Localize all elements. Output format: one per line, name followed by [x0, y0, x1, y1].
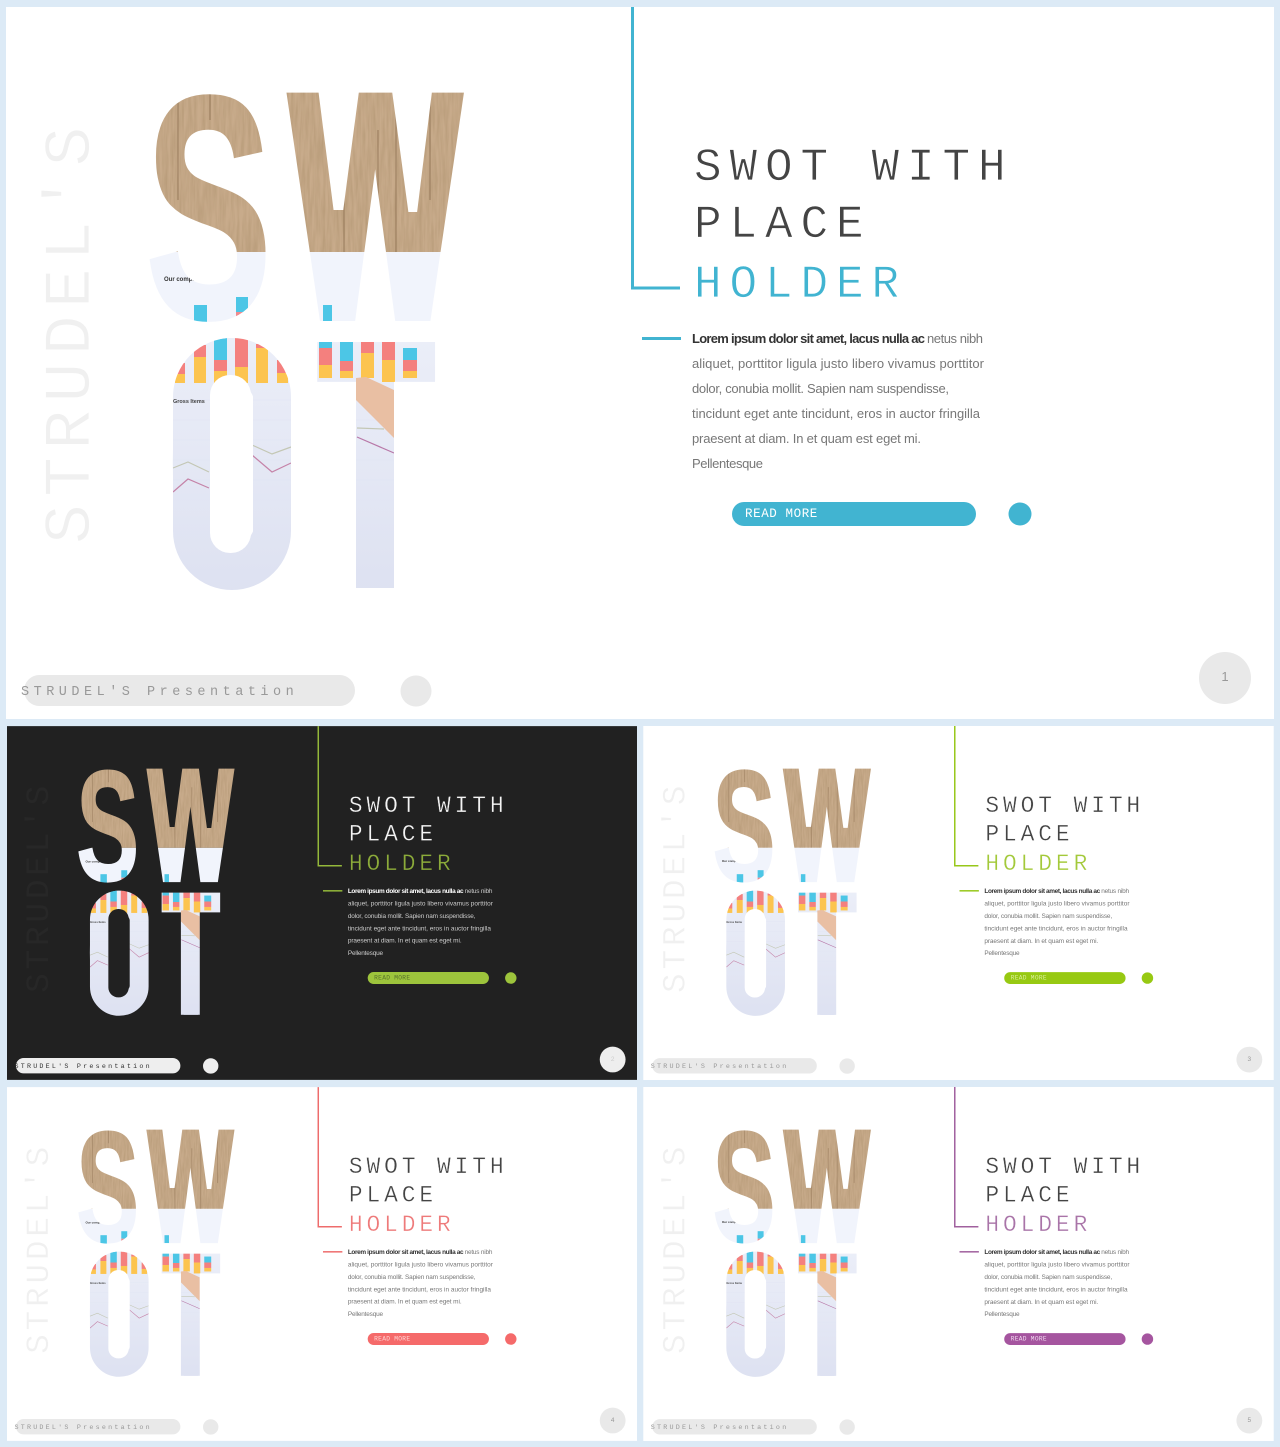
footer dot	[839, 1419, 855, 1435]
title: SWOT WITH	[349, 793, 508, 819]
SWOT picture letters	[710, 1126, 876, 1381]
accent bracket line	[318, 1087, 342, 1227]
read more button	[368, 1333, 489, 1345]
body text: dolor, conubia mollit. Sapien nam suspendisse,	[348, 913, 476, 920]
body text: netus nibh	[465, 888, 493, 895]
vertical watermark: STRUDEL'S	[34, 119, 109, 544]
title: PLACE	[985, 1182, 1074, 1208]
body text: Pellentesque	[984, 950, 1020, 957]
title: PLACE	[985, 821, 1074, 847]
page number	[1236, 1047, 1262, 1073]
title: HOLDER	[694, 259, 907, 311]
body text: netus nibh	[465, 1249, 493, 1256]
body text: praesent at diam. In et quam est eget mi.	[348, 1299, 462, 1306]
read more button: READ MORE	[374, 1336, 410, 1343]
body text: tincidunt eget ante tincidunt, eros in auctor fringilla	[984, 925, 1128, 932]
page number: 3	[1248, 1056, 1252, 1063]
body text: Lorem ipsum dolor sit amet, lacus nulla ac	[984, 888, 1101, 895]
body text: Pellentesque	[984, 1311, 1020, 1318]
body text: dolor, conubia mollit. Sapien nam suspendisse,	[348, 1274, 476, 1281]
body text: praesent at diam. In et quam est eget mi.	[348, 938, 462, 945]
footer label pill: STRUDEL'S Presentation	[651, 1063, 788, 1071]
title: HOLDER	[985, 851, 1091, 877]
body text: praesent at diam. In et quam est eget mi.	[984, 938, 1098, 945]
title: SWOT WITH	[694, 142, 1014, 194]
accent dot	[505, 972, 517, 984]
SWOT picture letters	[710, 765, 876, 1020]
body text	[692, 331, 985, 471]
body text: Lorem ipsum dolor sit amet, lacus nulla ac	[348, 1249, 464, 1256]
vertical watermark: STRUDEL'S	[21, 782, 58, 993]
footer label pill: STRUDEL'S Presentation	[651, 1424, 788, 1432]
panel: light slide, lime accent	[643, 726, 1274, 1080]
page number	[1199, 652, 1251, 704]
panel: dark slide, green accent	[7, 726, 637, 1080]
body text: Lorem ipsum dolor sit amet, lacus nulla ac	[348, 888, 464, 895]
title	[349, 1154, 508, 1238]
body text: netus nibh	[927, 331, 983, 346]
title: PLACE	[349, 1182, 437, 1208]
body text: dolor, conubia mollit. Sapien nam suspendisse,	[984, 1274, 1112, 1281]
body text	[984, 888, 1130, 957]
page number: 4	[611, 1417, 615, 1424]
body text: Pellentesque	[348, 1311, 384, 1318]
accent dot	[1008, 502, 1032, 526]
SWOT picture letters	[140, 85, 475, 598]
footer label pill	[651, 1058, 817, 1074]
title	[694, 142, 1014, 311]
title: HOLDER	[349, 851, 455, 877]
footer label pill	[21, 675, 355, 706]
title	[985, 1154, 1144, 1238]
footer label pill	[651, 1419, 817, 1435]
SWOT picture letters	[74, 1126, 240, 1381]
body text: praesent at diam. In et quam est eget mi.	[692, 431, 921, 446]
panel: light slide, purple accent	[643, 1087, 1274, 1441]
read more button: READ MORE	[745, 507, 818, 521]
read more button	[1004, 1333, 1126, 1345]
page number	[1236, 1408, 1262, 1434]
body text: netus nibh	[1101, 1249, 1129, 1256]
SWOT picture letters	[74, 765, 240, 1020]
body text: Pellentesque	[348, 950, 384, 957]
title: SWOT WITH	[985, 793, 1144, 819]
body text: tincidunt eget ante tincidunt, eros in auctor fringilla	[692, 406, 981, 421]
body text: Lorem ipsum dolor sit amet, lacus nulla ac	[692, 331, 925, 346]
accent dash	[959, 890, 979, 892]
title: HOLDER	[349, 1212, 455, 1238]
accent dash	[323, 890, 342, 892]
footer dot	[400, 676, 432, 706]
body text	[348, 888, 494, 957]
page number: 2	[611, 1056, 615, 1063]
body text	[984, 1249, 1130, 1318]
read more button	[732, 502, 976, 526]
body text: Lorem ipsum dolor sit amet, lacus nulla ac	[984, 1249, 1101, 1256]
title: SWOT WITH	[349, 1154, 508, 1180]
body text: aliquet, porttitor ligula justo libero vivamus porttitor	[984, 1261, 1130, 1268]
footer dot	[203, 1058, 218, 1074]
accent bracket line	[318, 726, 342, 866]
panel: main slide	[6, 7, 1274, 719]
body text: tincidunt eget ante tincidunt, eros in auctor fringilla	[348, 925, 491, 932]
footer label pill: STRUDEL'S Presentation	[21, 685, 298, 700]
footer label pill	[14, 1419, 180, 1434]
body text: Pellentesque	[692, 456, 763, 471]
read more button	[1004, 972, 1126, 984]
title: HOLDER	[985, 1212, 1091, 1238]
accent dot	[505, 1333, 517, 1345]
body text: aliquet, porttitor ligula justo libero vivamus porttitor	[348, 1261, 494, 1268]
body text: tincidunt eget ante tincidunt, eros in auctor fringilla	[984, 1286, 1128, 1293]
accent bracket line	[632, 7, 680, 288]
read more button: READ MORE	[1011, 1336, 1047, 1343]
accent bracket line	[955, 1087, 978, 1227]
title: SWOT WITH	[985, 1154, 1144, 1180]
read more button: READ MORE	[374, 975, 410, 982]
page number: 5	[1248, 1417, 1252, 1424]
footer label pill: STRUDEL'S Presentation	[14, 1063, 152, 1071]
accent dash	[642, 337, 681, 340]
accent dot	[1142, 972, 1153, 984]
body text: aliquet, porttitor ligula justo libero vivamus porttitor	[348, 900, 494, 907]
body text	[348, 1249, 494, 1318]
body text: praesent at diam. In et quam est eget mi.	[984, 1299, 1098, 1306]
footer label pill	[14, 1058, 180, 1073]
footer dot	[839, 1058, 855, 1074]
title: PLACE	[349, 821, 437, 847]
title	[349, 793, 508, 877]
body text: aliquet, porttitor ligula justo libero vivamus porttitor	[692, 356, 985, 371]
accent dash	[323, 1251, 342, 1253]
body text: aliquet, porttitor ligula justo libero vivamus porttitor	[984, 900, 1130, 907]
accent dash	[959, 1251, 979, 1253]
read more button	[368, 972, 489, 984]
body text: dolor, conubia mollit. Sapien nam suspendisse,	[984, 913, 1112, 920]
panel: light slide, red accent	[7, 1087, 637, 1441]
accent dot	[1142, 1333, 1153, 1345]
body text: tincidunt eget ante tincidunt, eros in auctor fringilla	[348, 1286, 491, 1293]
page number: 1	[1221, 669, 1229, 684]
read more button: READ MORE	[1011, 975, 1047, 982]
page number	[600, 1047, 626, 1072]
vertical watermark: STRUDEL'S	[658, 782, 695, 993]
vertical watermark: STRUDEL'S	[21, 1143, 58, 1354]
footer dot	[203, 1419, 218, 1435]
title	[985, 793, 1144, 877]
page number	[600, 1408, 626, 1433]
accent bracket line	[955, 726, 978, 866]
body text: dolor, conubia mollit. Sapien nam suspendisse,	[692, 381, 949, 396]
vertical watermark: STRUDEL'S	[658, 1143, 695, 1354]
body text: netus nibh	[1101, 888, 1129, 895]
title: PLACE	[694, 199, 872, 251]
footer label pill: STRUDEL'S Presentation	[14, 1424, 152, 1432]
